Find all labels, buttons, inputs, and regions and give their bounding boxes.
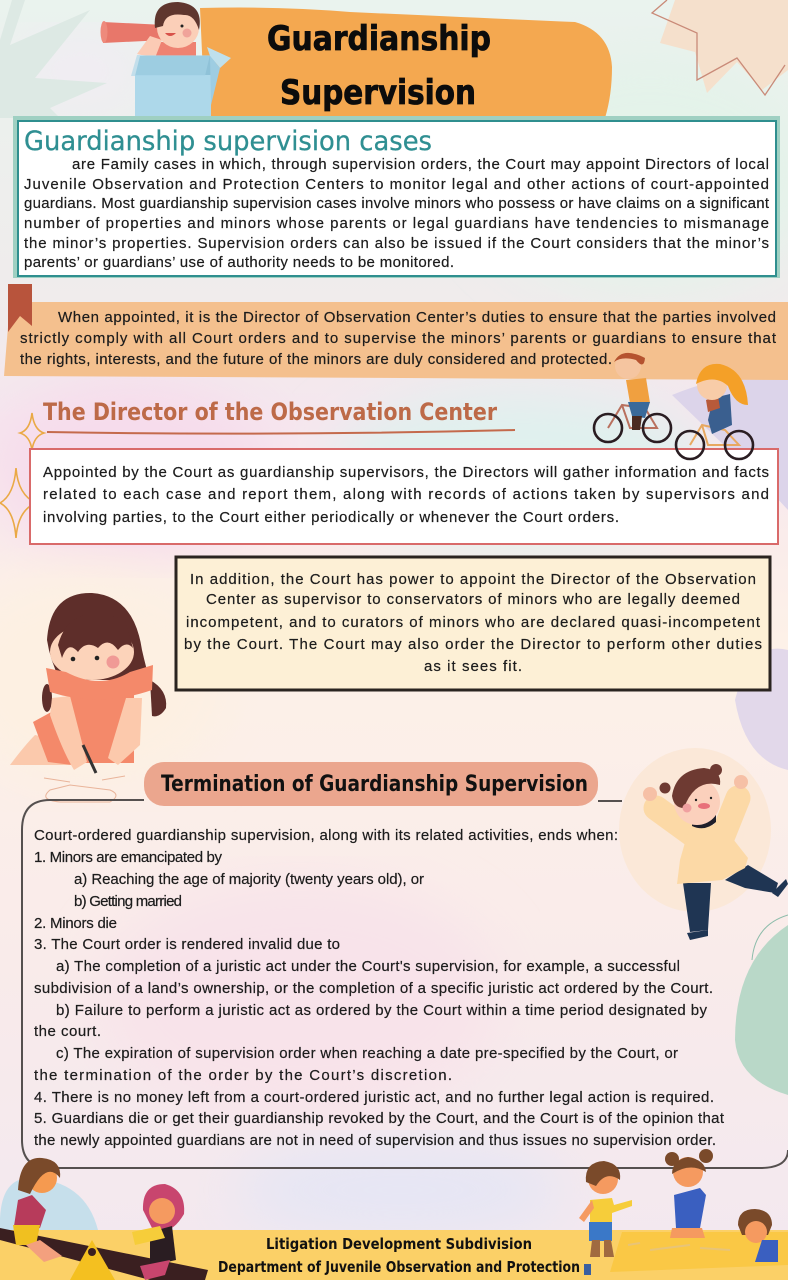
icon: sparkles	[0, 413, 44, 538]
panel: director duties	[4, 284, 788, 380]
panel: additional powers: as it sees fit.	[424, 658, 522, 675]
icon: children on bicycles	[594, 353, 753, 459]
decoration: sun shape top right	[652, 0, 788, 95]
panel: termination list: 5. Guardians die or get their guardianship revoked by the Court, and the Court is of the opinion that	[34, 1110, 725, 1127]
panel: termination list: b) Getting married	[74, 893, 182, 910]
panel: termination list: subdivision of a land’s ownership, or the completion of a specific juristic act ordered by the Court.	[34, 980, 713, 997]
panel: termination list: a) Reaching the age of majority (twenty years old), or	[74, 871, 424, 888]
panel: termination list: 2. Minors die	[34, 915, 117, 932]
title banner	[200, 8, 612, 118]
panel: termination list: c) The expiration of supervision order when reaching a date pre-specified by the Court, or	[56, 1045, 678, 1062]
title: Guardianship	[267, 19, 491, 59]
panel: termination list: the court.	[34, 1023, 101, 1040]
icon: children on seesaw	[0, 1158, 208, 1280]
panel: additional powers: Center as supervisor to conservators of minors who are legally deemed	[206, 591, 740, 608]
footer text	[218, 1235, 580, 1276]
panel: termination list	[22, 762, 788, 1168]
panel: director duties: When appointed, it is the Director of Observation Center’s duties to ensure that the parties involved	[58, 309, 776, 326]
panel: termination list: Court-ordered guardianship supervision, along with its related activities, ends when:	[34, 827, 618, 844]
panel: termination list: 3. The Court order is rendered invalid due to	[34, 936, 340, 953]
panel: guardianship supervision cases: guardians. Most guardianship supervision cases involve minors who possess or have claims on a significant	[24, 195, 770, 212]
heading: termination pill: Termination of Guardianship Supervision	[161, 772, 588, 797]
panel: termination list: 1. Minors are emancipated by	[34, 849, 222, 866]
panel: termination list: the newly appointed guardians are not in need of supervision and thus issues no supervision order.	[34, 1132, 716, 1149]
icon: dancing girl	[643, 764, 788, 940]
panel: termination list: a) The completion of a juristic act under the Court's supervision, for example, a successful	[56, 958, 680, 975]
panel: additional powers	[176, 557, 770, 690]
panel: appointed by the court: Appointed by the Court as guardianship supervisors, the Directors will gather information and facts	[43, 464, 769, 481]
panel: guardianship supervision cases: are Family cases in which, through supervision orders, the Court may appoint Directors of local	[72, 156, 769, 173]
title: Supervision	[280, 73, 476, 113]
panel: additional powers: incompetent, and to curators of minors who are declared quasi-incompetent	[186, 614, 761, 631]
panel: termination list: 4. There is no money left from a court-ordered juristic act, and no further legal action is required.	[34, 1089, 714, 1106]
panel: guardianship supervision cases: parents’ or guardians’ use of authority needs to be monitored.	[24, 254, 454, 271]
panel: appointed by the court: involving parties, to the Court either periodically or whenever the Court orders.	[43, 509, 619, 526]
panel: termination list: the termination of the order by the Court’s discretion.	[34, 1067, 452, 1084]
icon: bookmark	[8, 284, 32, 332]
heading: termination pill	[144, 762, 598, 806]
icon: girl drawing	[10, 593, 166, 802]
panel: appointed by the court: related to each case and report them, along with records of actions taken by supervisors and	[43, 486, 769, 503]
footer text: Department of Juvenile Observation and Protection	[218, 1258, 580, 1276]
panel: appointed by the court	[30, 449, 778, 544]
panel: director duties: the rights, interests, and the future of the minors are duly considered and protected.	[20, 351, 612, 368]
panel: guardianship supervision cases: Juvenile Observation and Protection Centers to monitor legal and other actions of court-appointed	[24, 176, 769, 193]
heading: the director of the observation center: The Director of the Observation Center	[43, 398, 497, 426]
footer band	[0, 1178, 788, 1280]
icon: child in box with telescope	[100, 2, 231, 117]
panel: director duties: strictly comply with all Court orders and to supervise the minors’ parents or guardians to ensure that	[20, 330, 777, 347]
panel: additional powers: In addition, the Court has power to appoint the Director of the Observation	[190, 571, 756, 588]
panel: additional powers: by the Court. The Court may also order the Director to perform other duties	[184, 636, 762, 653]
panel: guardianship supervision cases: number of properties and minors whose parents or legal guardians have tendencies to mismanage	[24, 215, 769, 232]
title	[267, 19, 491, 113]
heading: guardianship supervision cases: Guardianship supervision cases	[24, 126, 432, 157]
icon: children drawing	[579, 1149, 778, 1262]
panel: termination list: b) Failure to perform a juristic act as ordered by the Court within a time period designated by	[56, 1002, 708, 1019]
panel: guardianship supervision cases: the minor’s properties. Supervision orders can also be issued if the Court considers that the minor’s	[24, 235, 769, 252]
panel: guardianship supervision cases	[13, 116, 780, 278]
footer text: Litigation Development Subdivision	[266, 1235, 532, 1253]
